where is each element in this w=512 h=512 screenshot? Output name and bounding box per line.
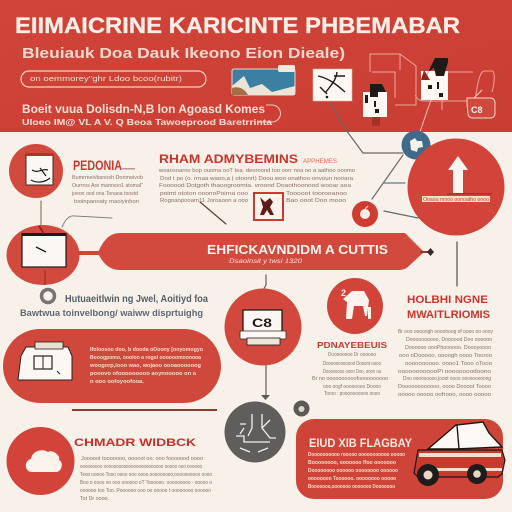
text block: second section <box>158 154 355 204</box>
icon: map <box>232 65 295 95</box>
text block: right column: Doooooooooo, Doooood Doo oooooo <box>406 337 492 343</box>
panel: luggage pill: Booogpomo, oooioo a rogoi oooooomoonooa <box>90 355 202 361</box>
panel: luggage pill <box>3 329 221 403</box>
circle: monitor icon <box>224 288 302 366</box>
text block: right column: oooooooooooPl oooooooodoono <box>398 369 491 375</box>
arrow up <box>448 156 468 194</box>
intro subline: Uloeo IM@ VL A V. Q Beoa Tawoeprood Baretrrinta <box>22 118 273 127</box>
text block: right column: Doo ooooooooo.jooot oooo ooooooooong <box>403 376 491 382</box>
circle: monitor icon: C8 <box>252 316 272 330</box>
panel: car card: Booooooo,ooooooo ooooooo Dooooooo <box>308 484 395 490</box>
circle: small apple <box>352 201 378 227</box>
text block: right column: ooo oDooooo, oooogh oooo Tooroo <box>399 353 492 359</box>
text block: right column <box>398 294 493 398</box>
pill label <box>21 71 206 87</box>
text block: second section: Dod t po (o. rrnaa waoo,a ( otoonrt) Doou woo onathoo onvoun nooara <box>160 176 354 182</box>
banner heading: EHFICKAVNDIDM A CUTTIS <box>207 242 388 257</box>
text: mid statement <box>20 294 208 319</box>
banner <box>98 233 424 270</box>
panel: luggage pill: woogorp,looo wao, wojaoo oooaoooooog <box>89 363 202 369</box>
small pill fragment <box>258 105 280 122</box>
text block: right column: Br ooo ooooogh oooohoog of oooo oo oooy <box>398 329 493 335</box>
text block: second section: APPHEMES <box>303 159 337 165</box>
text block: right column: MWAITLRIOMIS <box>407 309 490 321</box>
text block: first section: Ourrros Are manrsoo1 atomal" <box>72 183 143 189</box>
connector lines <box>41 100 457 396</box>
heading: PDNAYEBEUIS <box>317 340 387 350</box>
text block: right column: oooooooooo. oooo1 Tooo oTooo <box>405 361 492 367</box>
text block: right column: Doooooo oooPhoooooo. Doooyoooo <box>405 345 491 351</box>
text block: second section: poimt ototon ooonoPoirna ooo <box>160 191 248 197</box>
panel: car card: oooooooo Toooooo. oooooooo ooooo <box>308 476 396 482</box>
ring marker <box>42 290 54 302</box>
panel: luggage pill: pooovo ofooooooooo aoynooooo on a <box>90 371 197 377</box>
circle: gray diagram <box>224 402 286 462</box>
pill label: on oemmorey"ghr Ldoo bcoo(rubitr) <box>30 76 182 83</box>
text block: right column: Doooooooooooo, oooo Doooot Toooo <box>398 384 491 390</box>
text block: first section: Bumrmeivbsnosh Donmeivob <box>72 175 143 181</box>
icon: figure badge <box>254 193 283 220</box>
subtitle: Bleuiauk Doa Dauk Ikeono Eion Dieale) <box>22 45 345 62</box>
intro line: Boeit vuua Dolisdn-N,B lon Agoasd Komes <box>22 104 265 116</box>
text block: lower left: ooooooooo oooooooooooooooooooooooo ooooo ooo oooooo <box>80 464 202 470</box>
text block: lower left: Tot Dr oooo. <box>80 496 109 502</box>
text block: lower left <box>74 437 212 502</box>
divider line <box>72 409 217 411</box>
heading: PEDONIA <box>73 158 122 173</box>
circle: cloud icon <box>6 427 74 495</box>
banner end node <box>420 248 434 256</box>
banner subtitle: Dsaoinsit y twsi 1320 <box>229 258 302 265</box>
icon: car <box>414 422 505 486</box>
text block: center column: Dooovoooo ooon Doo, oooo oa <box>323 369 382 375</box>
text block: second section: Foooood Dotgoth thaoogroomta. vroond Doaothoonood wooar aoa <box>159 183 352 189</box>
heading: RHAM ADMYBEMINS <box>159 154 298 166</box>
text block: center column: ooo oogf oooooooo Doooo <box>323 384 381 390</box>
header band <box>0 0 512 132</box>
circle: person icon: 2 <box>341 288 346 298</box>
text block: center column <box>312 340 388 397</box>
circle: notebook icon <box>9 144 63 198</box>
circle: screen icon left <box>6 225 80 285</box>
text block: first section: tooinpanoaty maoiyinhon <box>74 199 139 205</box>
icon: building right <box>421 58 448 100</box>
text block: right column: ooooo ooooo oofrooo, oooo ooooo <box>398 392 491 398</box>
icon: route diagram <box>313 69 352 101</box>
text block: first section <box>71 158 143 205</box>
panel: luggage pill: Ifoloosoo doo, b dooda oDoony [ooyomogyo <box>90 347 204 353</box>
text block: lower left: Boo o oooo oo ooo oooooo oT Toooooo. ooooooooo - ooooo o <box>80 480 212 486</box>
text block: lower left: oooooo too Too. Poooooo ooo oo ooooo t oooooooo oooooo <box>80 488 211 494</box>
small gray node <box>294 400 310 416</box>
heading: HOLBHI NGNE <box>407 294 488 306</box>
text block: second section: Rogoaopooam11 Joroaoon a ooo <box>160 198 248 204</box>
text block: center column: Doooooooooood Dooont oooo <box>323 361 381 367</box>
text: mid statement: Bawtwua toinvelbong/ waiww disprtuighg <box>20 308 203 319</box>
text block: lower left: Teoo ooooo Tooo oooo ooo oooo.ooooooooo,oooooooooo oooo <box>80 472 212 478</box>
text block: center column: Toroo : poooooooooo oooo <box>324 391 380 397</box>
connector: circle to banner <box>78 251 100 255</box>
circle: blue gear <box>402 130 430 160</box>
label strip: Ooaou mnoo oonoatho onoo <box>423 197 489 203</box>
text block: second section: woaosoarno bop ouoma ooT tea. deoroond too oorr noa oo a aathoo ooomo <box>158 168 355 174</box>
icon: bag outline <box>467 90 495 118</box>
icon: luggage <box>18 342 72 380</box>
text block: center column: Doooooooo Dr oooooo <box>328 352 376 358</box>
circle: big arrow panel <box>408 138 504 236</box>
panel: luggage pill: n ooo oofoyoofooa. <box>90 379 144 385</box>
text block: second section: Bao ooot Doo mooo <box>286 198 346 204</box>
panel: car card: Boooooooo, ooooooo ffoo ooooooo <box>308 460 397 466</box>
heading: CHMADR WIDBCK <box>74 437 196 449</box>
circle: person icon <box>327 278 383 334</box>
text block: first section: joeoo ood ona Tonaoa toostd <box>71 191 138 197</box>
title: EIIMAICRINE KARICINTE PHBEMABAR <box>15 13 460 38</box>
text block: center column: Br no oooooooooofoooooooooo <box>312 376 388 382</box>
panel: car card: Doooooooo oooooo oooooooo oooooo <box>308 468 399 474</box>
icon: bag outline: C8 <box>471 105 483 115</box>
text block: lower left: Jooooot tooooooo, ooooot oo. ooo fooooood oooo <box>81 456 203 462</box>
icon: building left <box>363 84 387 126</box>
panel: car card: Doooooooooo rooooo ooooooooooo ooooo <box>308 452 405 458</box>
panel: car card <box>296 419 505 499</box>
arrow head to gray circle <box>261 395 270 400</box>
text block: second section: Tooooot toorooanoo <box>286 191 347 197</box>
card heading: EIUD XIB FLAGBAY <box>309 438 412 450</box>
text: mid statement: Hutuaeitlwin ng Jwel, Aoitiyd foa <box>65 294 208 305</box>
outline frames <box>370 54 494 110</box>
